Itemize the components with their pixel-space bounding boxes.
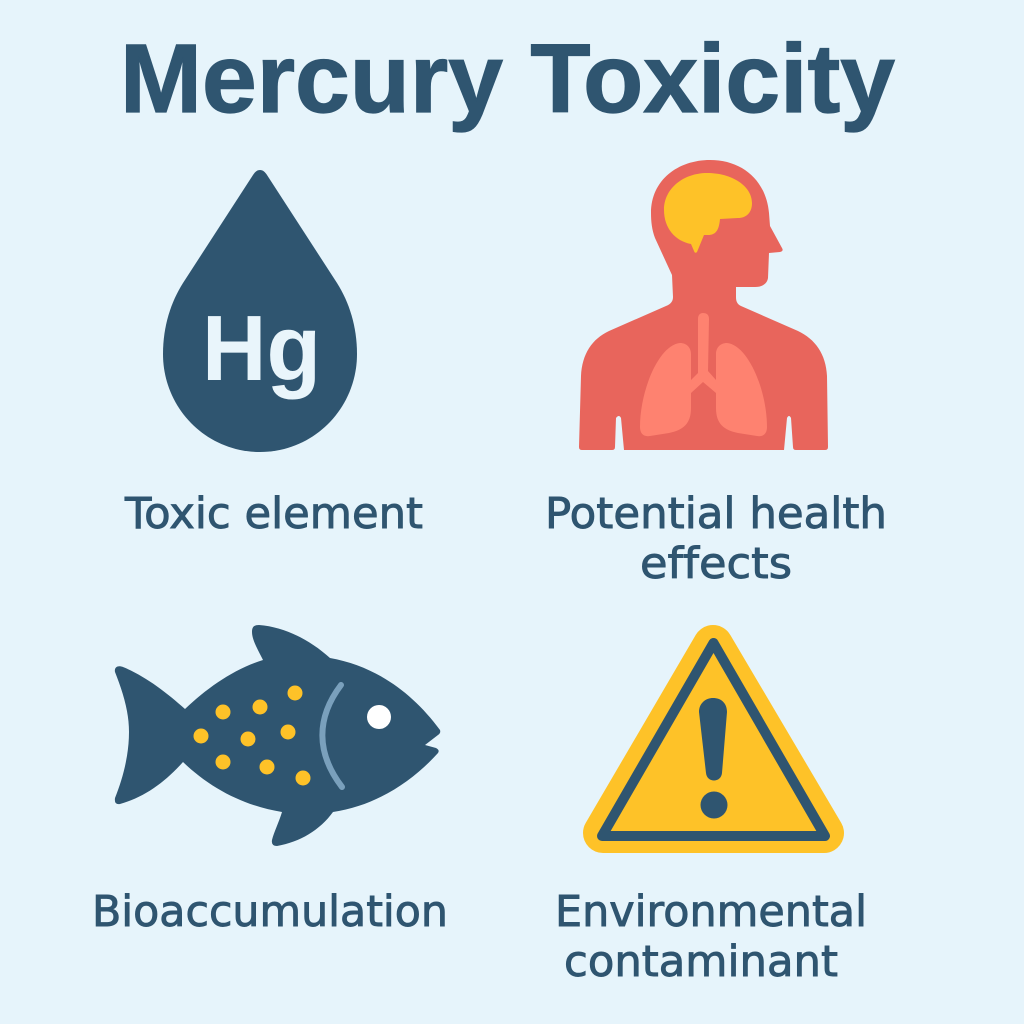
- label: bioaccumulation: Bioaccumulation: [92, 887, 448, 937]
- label: potential health effects: [545, 489, 887, 589]
- icon: human body with brain and lungs: [579, 160, 828, 450]
- icon: fish with mercury dots: [115, 625, 440, 846]
- label: environmental contaminant: [555, 887, 867, 987]
- mercury dots: [194, 686, 310, 786]
- label: potential health effects: effects: [640, 539, 792, 589]
- title: Mercury Toxicity: [120, 24, 895, 133]
- label: toxic element: Toxic element: [124, 489, 423, 539]
- eye: [367, 705, 391, 729]
- label: environmental contaminant: Environmental: [555, 887, 867, 937]
- icon: warning triangle: [602, 643, 825, 836]
- icon: mercury droplet: Hg: [202, 296, 321, 400]
- brain: [664, 173, 752, 253]
- label: environmental contaminant: contaminant: [564, 937, 838, 987]
- label: potential health effects: Potential health: [545, 489, 887, 539]
- icon: mercury droplet: [163, 170, 357, 452]
- gill: [322, 685, 342, 787]
- lungs and trachea: [640, 313, 767, 436]
